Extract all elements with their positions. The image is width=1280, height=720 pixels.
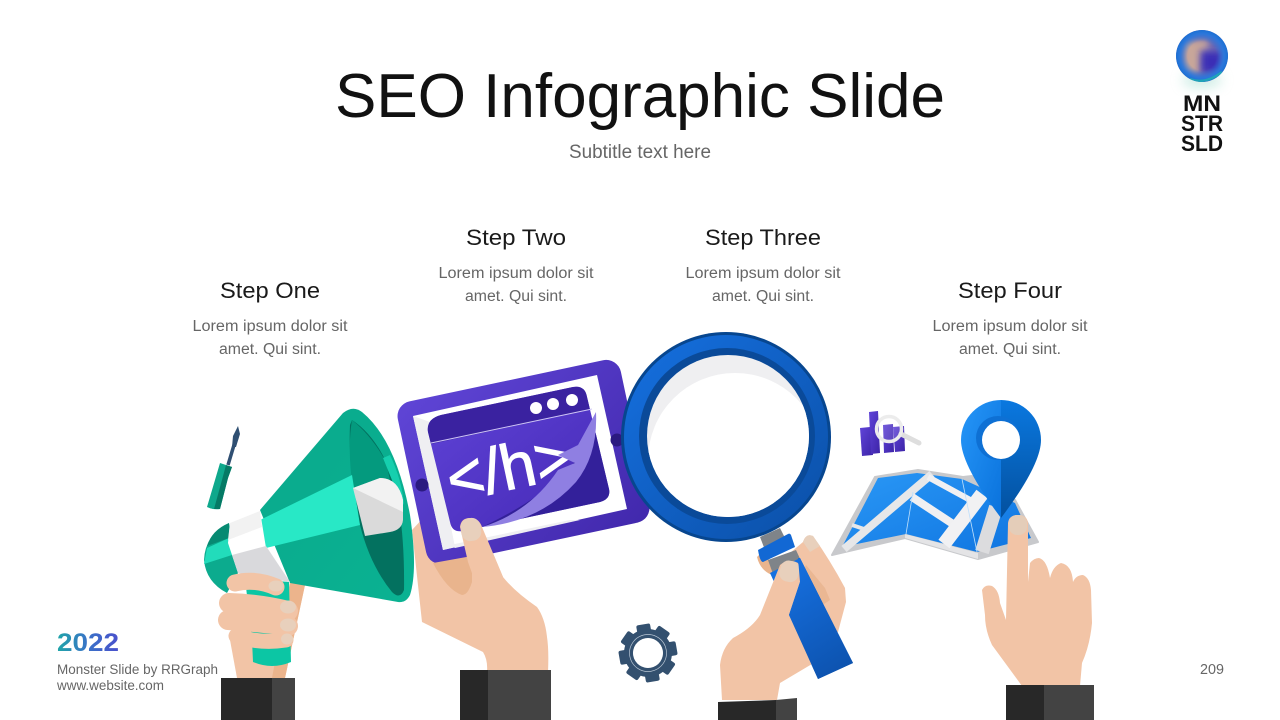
hand behind tablet (412, 500, 548, 672)
footer credits: Monster Slide by RRGraph (57, 662, 218, 677)
page number: 209 (1200, 662, 1224, 678)
step four text: Step Four (958, 278, 1063, 303)
step one text: amet. Qui sint. (219, 341, 321, 358)
footer year: 2022 (57, 629, 119, 657)
logo: STR (1181, 111, 1223, 136)
step two text (438, 225, 594, 305)
sleeve (221, 678, 295, 720)
step one text (192, 278, 348, 358)
megaphone handle (245, 578, 291, 666)
megaphone cone (260, 409, 414, 602)
collar (758, 534, 795, 562)
rear skin (757, 552, 780, 575)
tablet side buttons (416, 478, 428, 492)
white band (228, 511, 290, 582)
step three text (686, 225, 841, 305)
handle (770, 558, 853, 679)
step two text: Step Two (466, 225, 566, 250)
handle neck (760, 528, 802, 574)
step one text: Step One (220, 278, 320, 303)
footer credits: www.website.com (56, 678, 164, 693)
rim highlight (383, 455, 404, 505)
finger nails (268, 580, 296, 644)
cone inner (350, 420, 404, 596)
thumb (460, 518, 503, 590)
thumb nail (459, 517, 482, 542)
tablet screen (413, 375, 627, 550)
illustration: location pin (961, 400, 1041, 518)
wrist (230, 585, 305, 678)
subtitle: Subtitle text here (569, 142, 711, 163)
sleeve (1006, 685, 1094, 720)
thumb nail (778, 559, 801, 584)
step four text (932, 278, 1088, 358)
handle end (789, 558, 853, 679)
title: SEO Infographic Slide (335, 62, 945, 131)
light band (260, 475, 360, 548)
roads (844, 474, 996, 552)
tablet hand shadow (433, 556, 472, 595)
step four text: amet. Qui sint. (959, 341, 1061, 358)
speaker (353, 478, 403, 536)
illustration: screwdriver (207, 426, 240, 509)
tablet body (395, 357, 652, 567)
illustration: hand holding tablet (395, 357, 652, 720)
illustration: map (832, 470, 1038, 559)
back fingers (770, 535, 846, 660)
finger nail (803, 535, 820, 552)
illustration: gear (614, 619, 682, 687)
map blue (842, 473, 1031, 552)
step three text: Step Three (705, 225, 821, 250)
step one text: Lorem ipsum dolor sit (192, 318, 348, 335)
palm and thumb (720, 561, 812, 700)
logo: MN (1183, 91, 1221, 116)
map sheet (832, 470, 1038, 559)
step two text: Lorem ipsum dolor sit (438, 265, 594, 282)
illustration: magnifier and hand (621, 332, 853, 720)
illustration: pointing hand (982, 515, 1094, 720)
code symbol: </h> (440, 419, 578, 516)
logo: SLD (1181, 131, 1223, 156)
step four text: Lorem ipsum dolor sit (932, 318, 1088, 335)
illustration: megaphone and hand (204, 409, 414, 720)
browser window (428, 386, 610, 532)
step three text: amet. Qui sint. (712, 288, 814, 305)
footer credits (56, 662, 218, 693)
sleeve (718, 698, 797, 720)
fingers (228, 581, 288, 641)
finger nail (1009, 515, 1027, 535)
curling arrow (482, 412, 596, 527)
illustration: bar chart icon (860, 411, 919, 456)
step two text: amet. Qui sint. (465, 288, 567, 305)
logo (1176, 30, 1228, 156)
back cap (204, 523, 238, 593)
sleeve (460, 670, 551, 720)
step three text: Lorem ipsum dolor sit (686, 265, 841, 282)
lens (621, 332, 831, 547)
